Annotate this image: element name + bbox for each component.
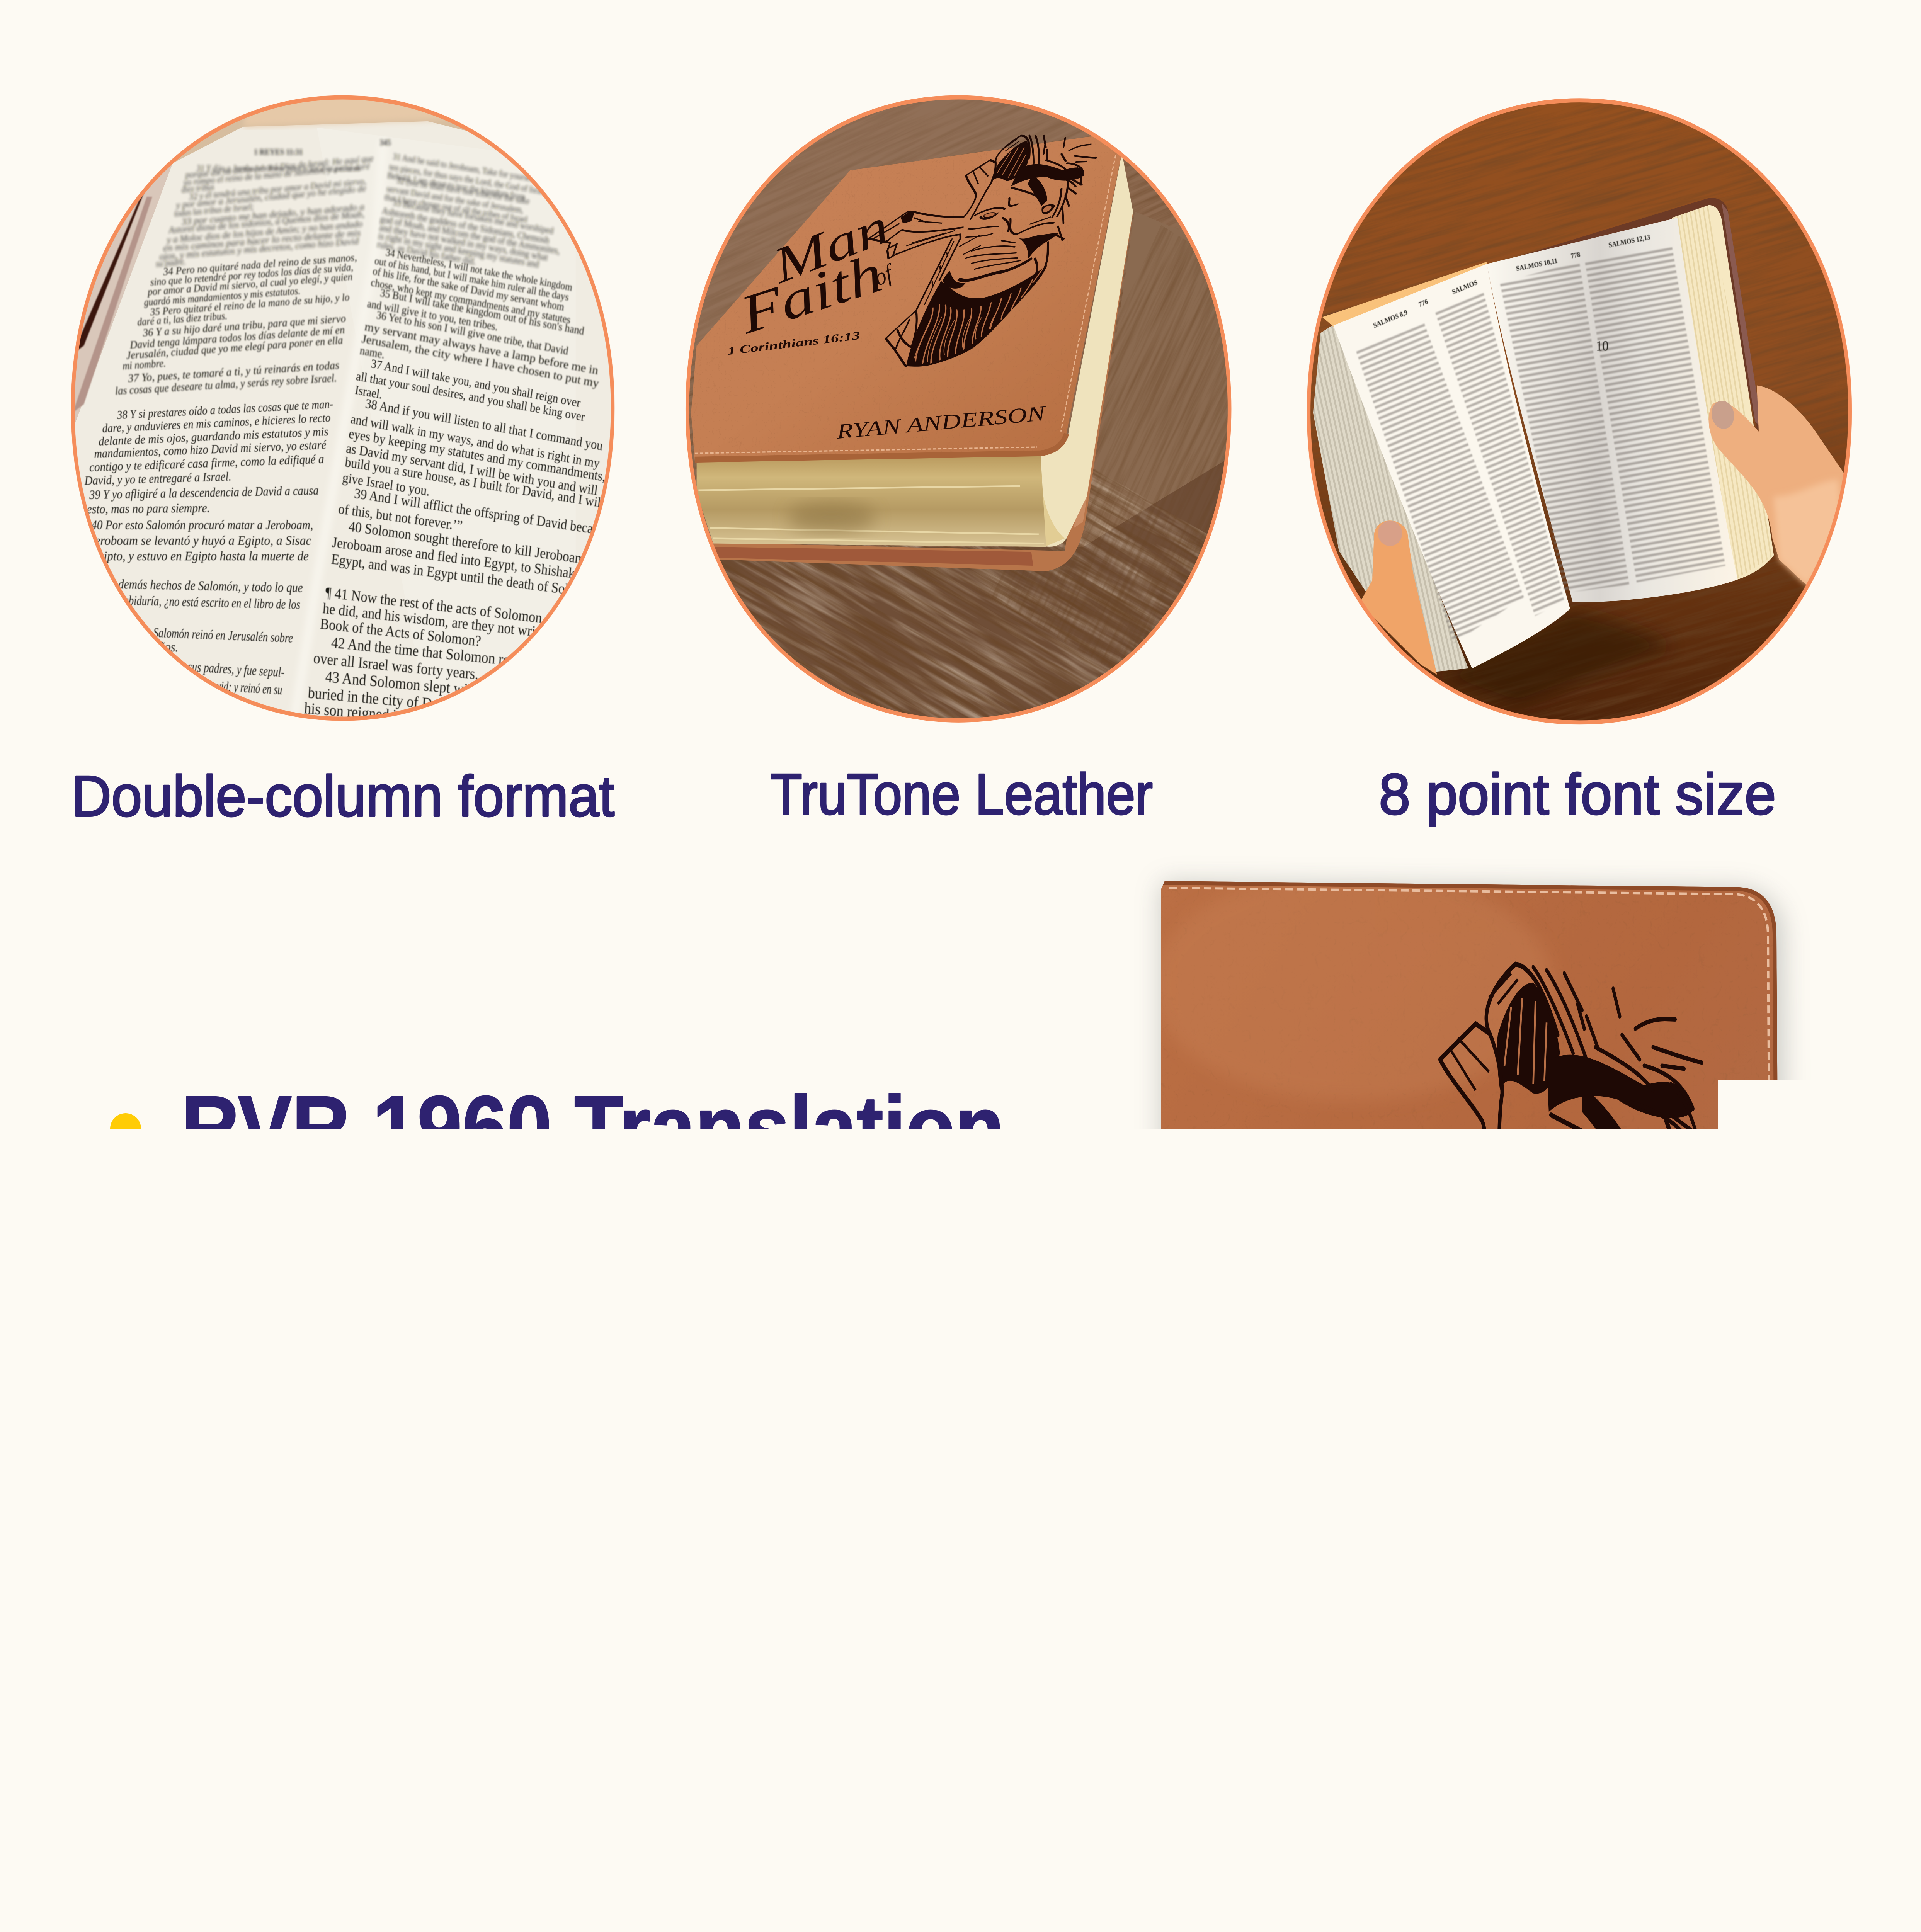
- blurred upper text: diez tribus: [181, 182, 214, 195]
- medium focus text: name.: [359, 344, 386, 361]
- medium focus text: sino que lo retendré por rey todos los días de su vida,: [150, 261, 354, 288]
- sharp lower text: eyes by keeping my statutes and my commandments,: [348, 426, 607, 485]
- sharp lower text: delante de mis ojos, guardando mis estatutos y mis: [98, 425, 328, 448]
- sharp lower text: 42 And the time that Solomon reigned: [331, 634, 540, 672]
- left hand: [1359, 520, 1437, 675]
- photo: close-up of double-column page: [71, 95, 615, 721]
- blurred upper text: yo rompo el reino de la mano de Salomón, y a ti te daré: [182, 161, 371, 187]
- sharp lower text: 40 Por esto Salomón procuró matar a Jeroboam,: [91, 518, 313, 532]
- sharp lower text: ¶ 41 Now the rest of the acts of Solomon, and all: [325, 584, 585, 631]
- sharp lower text: dare, y anduvieres en mis caminos, e hicieres lo recto: [102, 411, 331, 435]
- engraved text small book: of: [871, 258, 898, 291]
- medium focus text: por amor a David mi siervo, al cual yo elegí, y quien: [146, 270, 353, 298]
- engraved title: Man of Faith: 1 Corinthians 16:13: [1251, 1524, 1439, 1546]
- sharp lower text: Israel.: [354, 383, 383, 401]
- page headers: [1372, 233, 1651, 354]
- medium focus text: out of his hand, but I will make him ruler all the days: [374, 255, 570, 303]
- sharp lower text: 38 Y si prestares oído a todas las cosas que te man-: [116, 398, 333, 422]
- medium focus text: guardó mis mandamientos y mis estatutos.: [144, 285, 301, 308]
- page headers: 776: [1418, 298, 1429, 309]
- engraved text small book: 1 Corinthians 16:13: [727, 329, 861, 357]
- sharp lower text: over all Israel was forty years.: [313, 650, 479, 683]
- medium focus text: 34 Pero no quitaré nada del reino de sus manos,: [162, 251, 357, 278]
- right page: [1487, 218, 1737, 602]
- engraved title: Man of Faith: of: [1399, 1344, 1438, 1401]
- sharp lower text: [20, 357, 611, 729]
- bullet dot 1: [110, 1113, 141, 1144]
- blurred upper text: en mis caminos para hacer lo recto delante de mis: [163, 228, 361, 253]
- sharp lower text: David, y yo te entregaré a Israel.: [84, 469, 231, 488]
- page headers: SALMOS 12,13: [1608, 233, 1651, 249]
- sharp lower text: all that your soul desires, and you shall be king over: [355, 369, 586, 424]
- sharp lower text: he did, and his wisdom, are they not written in the: [322, 600, 589, 645]
- bullet text 1: RVR 1960 Translation: [181, 1078, 1004, 1178]
- sharp lower text: 42 Los días que Salomón reinó en Jerusalén sobre: [86, 623, 293, 646]
- left page edge block: [1313, 325, 1468, 672]
- medium focus text: chose, who kept my commandments and my statutes: [370, 276, 572, 326]
- blurred upper text: ojos, y mis estatutos y mis decretos, como hizo David: [159, 236, 359, 262]
- page headers: SALMOS 8,9: [1372, 308, 1409, 330]
- blurred upper text: 32 (but he shall have one tribe, for the sake: [396, 175, 530, 206]
- photo: TruTone leather book on wood table: [511, 0, 1404, 968]
- dimension label: Dimension: 5.38” x 8.25”: [994, 1808, 1852, 1896]
- page headers: 778: [1570, 250, 1581, 260]
- bullet dot 2: [110, 1257, 141, 1288]
- medium focus text: of his life, for the sake of David my servant whom: [372, 265, 565, 313]
- engraved text small book: [727, 197, 1047, 444]
- blurred upper text: and they have not walked in my ways, doing what: [379, 222, 549, 263]
- sharp lower text: tado en la ciudad de su padre David; y reinó en su: [90, 671, 282, 698]
- blurred upper text: todas las tribus de Israel;: [174, 202, 254, 219]
- medium focus text: my servant may always have a lamp before me in: [364, 320, 599, 377]
- sharp lower text: Jeroboam se levantó y huyó a Egipto, a Sisac: [89, 533, 311, 548]
- blurred upper text: porque así ha dicho Jehová Dios de Israel: He aquí que: [184, 153, 374, 180]
- sharp lower text: mandamientos, como hizo David mi siervo, yo estaré: [94, 438, 327, 461]
- medium focus text: 37 Yo, pues, te tomaré a ti, y tú reinarás en todas: [128, 359, 340, 384]
- engraved text small book: Man: [766, 197, 895, 294]
- medium focus text: 34 Nevertheless, I will not take the whole kingdom: [385, 246, 573, 293]
- sharp lower text: build you a sure house, as I built for David, and I will: [344, 454, 605, 511]
- photo: open Bible held in two hands: [1177, 0, 1921, 914]
- bullet list: [110, 1078, 1060, 1470]
- gilded fore edge: [697, 454, 1046, 547]
- bullet dot 3: [110, 1401, 141, 1432]
- blurred upper text: 33 Because they have forsaken me and worshiped: [392, 197, 554, 236]
- sharp lower text: hizo, y su sabiduría, ¿no está escrito en el libro de los: [78, 592, 300, 612]
- sharp lower text: esto, mas no para siempre.: [87, 501, 210, 516]
- medium focus text: Jerusalem, the city where I have chosen to put my: [361, 332, 600, 390]
- blurred upper text: god of Moab, and Milcom the god of the Ammonites,: [379, 214, 561, 257]
- sharp lower text: his son reigned in his place.: [304, 699, 460, 729]
- leather book cover: [1152, 869, 1809, 1785]
- bullet text 2: Smyth-sewn binding: [176, 1223, 989, 1323]
- sharp lower text: give Israel to you.: [342, 470, 430, 499]
- blurred upper text: [155, 138, 561, 270]
- medium focus text: mi nombre.: [122, 357, 166, 372]
- blurred upper text: Ashtoreth the goddess of the Sidonians, Chemosh: [381, 206, 550, 246]
- engraved title: Man of Faith: [1205, 1211, 1467, 1546]
- left page: [1333, 264, 1570, 668]
- engraved text small book: RYAN ANDERSON: [835, 401, 1047, 444]
- blurred upper text: su padre.: [155, 256, 186, 269]
- sharp lower text: as David my servant did, I will be with you and will: [345, 441, 599, 498]
- blurred upper text: y a Moloc dios de los hijos de Amón; y no han andado: [166, 218, 363, 245]
- engraved title: Man of Faith: Man: [1205, 1211, 1423, 1382]
- blurred upper text: rules, as David his father did.: [376, 239, 476, 267]
- blurred upper text: Behold, I am about to tear the kingdom from: [387, 170, 526, 202]
- blurred upper text: servant David and for the sake of Jerusalem,: [386, 184, 524, 215]
- blurred upper text: 31 And he said to Jeroboam, Take for yourself: [392, 151, 536, 184]
- sharp lower text: 39 Y yo afligiré a la descendencia de David a causa: [89, 483, 319, 502]
- sharp lower text: and will walk in my ways, and do what is right in my: [350, 412, 601, 471]
- right page edge block: [1672, 205, 1774, 580]
- blurred upper text: 33 por cuanto me han dejado, y han adorado a: [181, 201, 364, 227]
- blurred upper text: 31 Y dijo a Jeroboam: Toma para ti los diez pedazos: [196, 163, 360, 173]
- sharp lower text: 37 And I will take you, and you shall reign over: [370, 357, 582, 410]
- yellow wave band: [0, 1708, 1921, 1932]
- sharp lower text: 43 And Solomon slept with his fathers: [325, 668, 541, 705]
- medium focus text: las cosas que deseare tu alma, y serás rey sobre Israel.: [115, 371, 337, 397]
- medium focus text: [115, 246, 600, 397]
- engraved title: Man of Faith: Faith: [1236, 1370, 1467, 1529]
- blurred upper text: Astoret diosa de los sidonios, a Quemos dios de Moab,: [168, 209, 364, 235]
- sharp lower text: buried in the city of David his father.: [307, 684, 516, 720]
- cover top: [691, 136, 1122, 461]
- sharp lower text: Egipto, y estuvo en Egipto hasta la muerte de: [90, 549, 309, 563]
- engraved name: RYAN ANDERSON: [1473, 1720, 1750, 1762]
- small lion engraving: [796, 121, 1123, 384]
- blurred upper text: 1 REYES 11:31: [254, 148, 303, 157]
- medium focus text: 35 Pero quitaré el reino de la mano de su hijo, y lo: [150, 291, 350, 318]
- page headers: 10: [1596, 338, 1608, 354]
- caption: double-column format: Double-column format: [71, 764, 614, 828]
- side page block: [1041, 153, 1133, 547]
- blurred upper text: 32 y él tendrá una tribu por amor a David mi siervo,: [188, 176, 366, 202]
- medium focus text: Jerusalén, ciudad que yo me elegí para poner en ella: [126, 334, 343, 361]
- sharp lower text: Book of the Acts of Solomon?: [320, 615, 482, 650]
- back cover: [713, 211, 1133, 571]
- medium focus text: and will give it to you, ten tribes.: [366, 297, 499, 333]
- bullet text 3: Gold gilded page edges: [184, 1370, 1060, 1470]
- sharp lower text: todo Israel fueron cuarenta años.: [20, 634, 179, 655]
- sharp lower text: 38 And if you will listen to all that I command you: [364, 396, 604, 454]
- blurred upper text: y por amor a Jerusalén, ciudad que yo he elegido de: [175, 184, 366, 210]
- sharp lower text: 39 And I will afflict the offspring of David because: [354, 485, 611, 539]
- sharp lower text: Jeroboam arose and fled into Egypt, to Shishak king: [331, 534, 602, 585]
- caption: TruTone leather: TruTone Leather: [770, 762, 1153, 827]
- medium focus text: 35 But I will take the kingdom out of his son's hand: [379, 286, 585, 337]
- sharp lower text: contigo y te edificaré casa firme, como la edifiqué a: [89, 452, 324, 474]
- engraved text small book: Faith: [734, 242, 888, 345]
- blurred upper text: that I have chosen out of all the tribes of Israel: [384, 192, 528, 224]
- medium focus text: 36 Yet to his son I will give one tribe, that David: [376, 308, 569, 357]
- sharp lower text: 43 Y durmió Salomón con sus padres, y fue sepul-: [77, 653, 285, 680]
- page headers: SALMOS: [1451, 278, 1478, 296]
- cover edge: [1322, 198, 1763, 429]
- right hand: [1708, 385, 1846, 585]
- medium focus text: David tenga lámpara todos los días delante de mí en: [129, 323, 345, 351]
- medium focus text: 36 Y a su hijo daré una tribu, para que mi siervo: [142, 312, 346, 339]
- sharp lower text: Egypt, and was in Egypt until the death of Solomon.: [330, 551, 602, 602]
- sharp lower text: 40 Solomon sought therefore to kill Jeroboam.: [348, 518, 589, 568]
- sharp lower text: of this, but not forever.’”: [338, 501, 463, 534]
- blurred upper text: ten pieces, for thus says the Lord, the God of Israel: [389, 162, 547, 197]
- medium focus text: daré a ti, las diez tribus.: [137, 310, 228, 328]
- page headers: SALMOS 10,11: [1516, 257, 1558, 272]
- lion and cross engraving: [1298, 964, 1720, 1611]
- blurred upper text: 345: [380, 138, 391, 147]
- sharp lower text: 41 Los demás hechos de Salomón, y todo lo que: [85, 577, 303, 595]
- caption: 8 point font size: 8 point font size: [1379, 762, 1776, 827]
- blurred upper text: is right in my sight and keeping my statutes and: [378, 231, 540, 270]
